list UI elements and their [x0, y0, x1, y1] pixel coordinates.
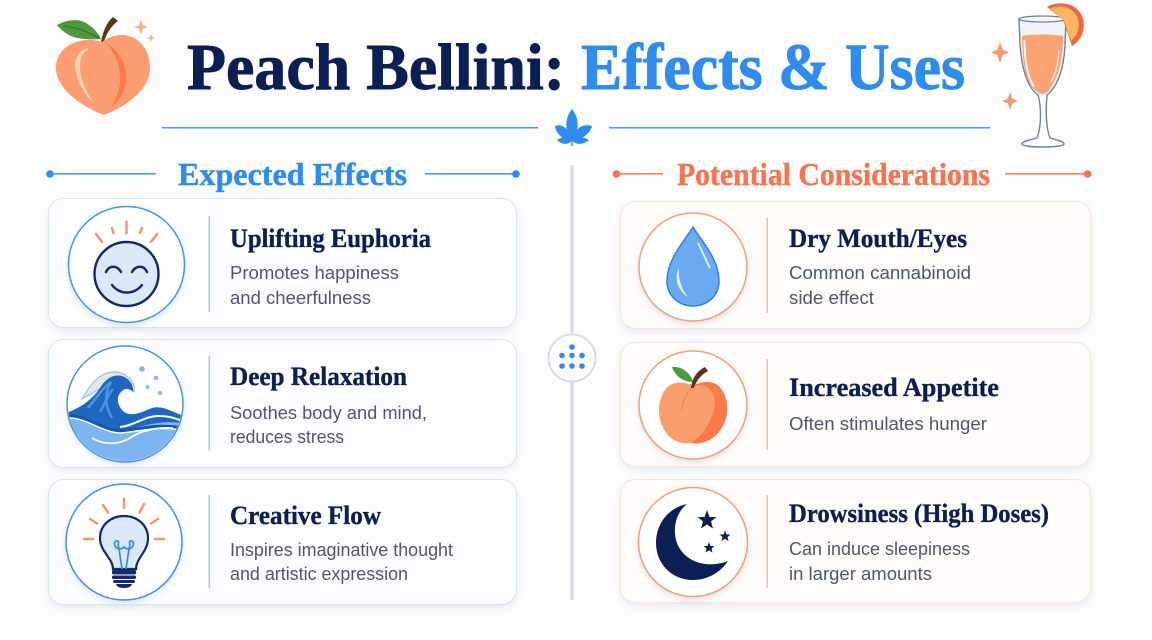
card: Dry Mouth/Eyes [620, 202, 1090, 328]
icon: water drop [639, 213, 747, 321]
title [187, 31, 965, 104]
card: Uplifting Euphoria: Uplifting Euphoria [230, 224, 431, 253]
card: Drowsiness (High Doses): Can induce sleepiness [789, 538, 970, 559]
card: Uplifting Euphoria [48, 198, 516, 328]
card: Deep Relaxation: Deep Relaxation [230, 362, 408, 391]
card: Dry Mouth/Eyes: Dry Mouth/Eyes [789, 224, 967, 253]
card: Increased Appetite: Often stimulates hunger [789, 413, 987, 434]
card: Drowsiness (High Doses): Drowsiness (High Doses) [789, 499, 1049, 528]
card: Dry Mouth/Eyes: Common cannabinoid [789, 262, 971, 283]
section heading: Expected Effects: Expected Effects [178, 156, 407, 192]
card: Increased Appetite [620, 342, 1090, 466]
title: Effects & Uses [581, 31, 965, 104]
card: Creative Flow [48, 480, 516, 604]
card: Dry Mouth/Eyes: side effect [789, 287, 874, 308]
icon: peach sparkles [134, 19, 155, 42]
card: Increased Appetite: Increased Appetite [789, 373, 999, 402]
card: Drowsiness (High Doses): in larger amounts [789, 563, 932, 584]
section heading: Expected Effects [46, 156, 520, 192]
icon: moon and stars [638, 488, 748, 596]
card: Creative Flow: and artistic expression [230, 563, 408, 584]
icon: bellini glass [1019, 3, 1084, 147]
badge: dots [548, 334, 596, 382]
section heading: Potential Considerations: Potential Considerations [677, 156, 990, 192]
icon: ocean wave [66, 346, 186, 470]
central vertical divider [548, 165, 596, 600]
title: Peach Bellini: [187, 31, 565, 104]
icon: smiling face [68, 206, 184, 322]
icon: light bulb [66, 484, 182, 600]
icon: glass sparkles [991, 42, 1018, 110]
card: Drowsiness (High Doses) [620, 480, 1090, 602]
card: Deep Relaxation [48, 340, 516, 470]
icon: peach [639, 351, 747, 459]
card: Deep Relaxation: reduces stress [230, 426, 344, 447]
peach slice garnish [1047, 3, 1084, 46]
card: Uplifting Euphoria: Promotes happiness [230, 262, 399, 283]
icon: cannabis leaf [555, 109, 592, 146]
icon: peach with leaf [56, 17, 150, 115]
card: Deep Relaxation: Soothes body and mind, [230, 402, 427, 423]
card: Creative Flow: Inspires imaginative thought [230, 539, 453, 560]
header divider right [609, 127, 990, 128]
card: Creative Flow: Creative Flow [230, 501, 381, 530]
card: Uplifting Euphoria: and cheerfulness [230, 287, 371, 308]
header divider left [162, 127, 538, 128]
